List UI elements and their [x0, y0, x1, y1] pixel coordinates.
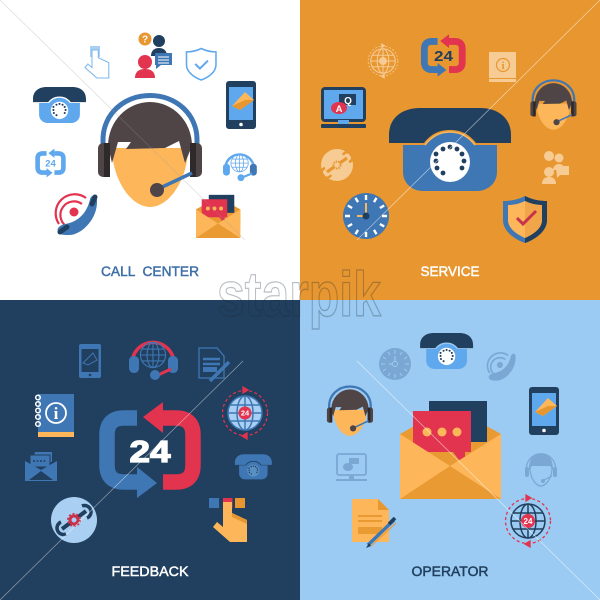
- icon: 24 arrows: 24: [434, 49, 453, 65]
- icon: rotary phone: [420, 333, 473, 369]
- icon: dashed globe: [368, 44, 398, 78]
- icon: operator head: [530, 80, 576, 130]
- icon: operator outline: [525, 454, 557, 486]
- icon: 24 arrows: [424, 34, 462, 77]
- heading: service: SERVICE: [420, 264, 480, 279]
- icon: tools circle: [321, 149, 353, 181]
- icon: dashed globe 24: 24: [524, 517, 533, 526]
- icon: envelope with chat: [196, 195, 240, 238]
- heading: feedback: FEEDBACK: [112, 564, 188, 579]
- icon: shield with check: [503, 196, 547, 243]
- icon: mobile with mail: [529, 387, 559, 435]
- central operator head: [98, 96, 202, 207]
- central 24 arrows: 24: [130, 434, 171, 469]
- icon: document with pen: [352, 499, 396, 548]
- panel: service: [300, 0, 600, 300]
- icon: handset with signal: [56, 194, 97, 235]
- icon: clock: [379, 348, 411, 380]
- icon: wall clock: [343, 193, 389, 239]
- icon: dashed globe 24: [506, 495, 550, 547]
- icon: rotary phone: [33, 87, 86, 123]
- icon: dashed globe 24: [222, 387, 268, 439]
- icon: info book: [36, 394, 74, 437]
- icon: rotary phone: [235, 454, 272, 479]
- icon: laptop Q and A: A: [336, 104, 343, 115]
- icon: dashed globe 24: 24: [241, 409, 250, 418]
- icon: mobile with mail: [226, 81, 256, 129]
- icon: operator head: [327, 387, 373, 436]
- icon: info book: i: [54, 404, 59, 423]
- icon: touch finger: [85, 46, 109, 78]
- icon: shield outline: [186, 48, 216, 80]
- icon: document with pen: [199, 348, 229, 381]
- icon: finger pressing button: [209, 498, 247, 542]
- icon: info book: [489, 52, 516, 82]
- icon: 24 arrows: 24: [45, 158, 56, 170]
- icon: people chat: [135, 32, 172, 78]
- icon: people chat: [542, 151, 569, 184]
- watermark: starpik: [217, 260, 382, 330]
- heading: operator: OPERATOR: [412, 564, 489, 579]
- icon: tools circle: [51, 497, 97, 543]
- icon: globe headset: [129, 342, 178, 380]
- heading: call center: CALL CENTER: [101, 264, 199, 279]
- icon: info book: i: [501, 60, 505, 72]
- panel: feedback: [0, 300, 300, 600]
- central envelope with chat: [400, 401, 501, 499]
- icon: envelope blue: [25, 452, 57, 481]
- icon: mobile outline: [79, 344, 101, 378]
- icon: people chat: ?: [142, 34, 148, 46]
- icon: laptop Q and A: [321, 87, 366, 128]
- icon: laptop Q and A: [336, 454, 367, 481]
- panel: operator: [300, 300, 600, 600]
- icon: laptop Q and A: Q: [344, 96, 352, 107]
- icon: handset signal: [487, 353, 516, 381]
- icon: 24 arrows: [38, 149, 63, 177]
- central 24 arrows: [107, 402, 193, 498]
- central rotary phone: [389, 108, 511, 191]
- icon: globe headset: [223, 154, 257, 181]
- panel: call center: [0, 0, 300, 300]
